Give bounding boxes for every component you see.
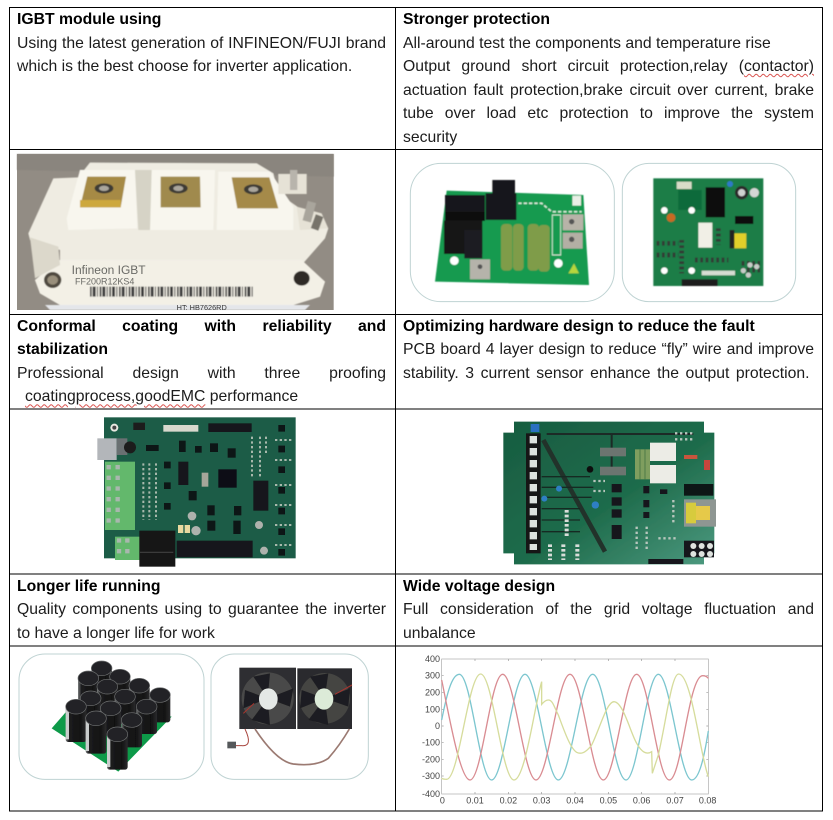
x axis labels: 0.03 bbox=[533, 795, 550, 805]
body text bbox=[403, 601, 814, 642]
heading: Optimizing hardware design to reduce the fault bbox=[403, 318, 755, 335]
body text: actuation fault protection,brake circuit over current, brake bbox=[403, 82, 814, 99]
body text: Using the latest generation of INFINEON/FUJI brand bbox=[17, 35, 386, 52]
body text bbox=[403, 35, 814, 146]
body text: tube over load etc protection to improve the system bbox=[403, 105, 814, 122]
body text: Full consideration of the grid voltage fluctuation and bbox=[403, 601, 814, 618]
text cell: Conformal coating bbox=[17, 318, 386, 408]
y axis labels: 100 bbox=[425, 704, 440, 714]
control board with transformer bbox=[622, 163, 796, 302]
x axis labels: 0.02 bbox=[500, 795, 517, 805]
phase curve: red bbox=[442, 674, 708, 780]
body text: stability. 3 current sensor enhance the output protection. bbox=[403, 365, 809, 382]
image: protection boards in rounded frames bbox=[410, 163, 796, 302]
twin cooling fans bbox=[211, 654, 368, 779]
module marking text: FF200R12KS4 bbox=[75, 277, 134, 287]
body text bbox=[17, 365, 386, 408]
x axis labels: 0.07 bbox=[666, 795, 684, 805]
text cell: Longer life running bbox=[17, 578, 386, 642]
body text bbox=[17, 35, 386, 75]
image: capacitor bank and cooling fans bbox=[19, 654, 368, 779]
y axis labels: -100 bbox=[422, 738, 440, 748]
x axis labels: 0.06 bbox=[633, 795, 650, 805]
image: Infineon IGBT module photo bbox=[17, 154, 334, 312]
module marking text: HT: HB7626RD bbox=[177, 303, 227, 312]
y axis labels bbox=[422, 654, 440, 799]
body text bbox=[17, 601, 386, 642]
x axis labels: 0.05 bbox=[600, 795, 617, 805]
text cell: Stronger protection bbox=[403, 11, 814, 146]
body text: Output ground short circuit protection,relay (contactor) bbox=[403, 58, 814, 75]
image: four layer PCB main board bbox=[503, 422, 716, 564]
body text: security bbox=[403, 129, 457, 146]
x axis labels bbox=[440, 795, 716, 805]
module marking text: Infineon IGBT bbox=[72, 263, 146, 277]
y axis labels: 400 bbox=[425, 654, 440, 664]
heading: Stronger protection bbox=[403, 11, 550, 28]
body text: to have a longer life for work bbox=[17, 625, 215, 642]
heading: IGBT module using bbox=[17, 11, 161, 28]
x axis labels: 0.08 bbox=[699, 795, 716, 805]
body text: Professional design with three proofing bbox=[17, 365, 386, 382]
body text bbox=[403, 341, 814, 382]
phase curve: yellow bbox=[442, 674, 708, 780]
module marking text bbox=[72, 263, 227, 312]
relay and brake resistor board bbox=[410, 163, 614, 302]
capacitor bank bbox=[19, 654, 204, 779]
body text: PCB board 4 layer design to reduce “fly” wire and improve bbox=[403, 341, 814, 358]
phase curve: blue bbox=[442, 674, 708, 780]
text cell: IGBT module using bbox=[17, 11, 386, 75]
x axis labels: 0.04 bbox=[566, 795, 584, 805]
heading: Wide voltage design bbox=[403, 578, 555, 595]
y axis labels: -200 bbox=[422, 754, 440, 764]
body text: All-around test the components and temperature rise bbox=[403, 35, 771, 52]
image: conformal coated control board bbox=[97, 417, 296, 567]
heading bbox=[17, 318, 386, 358]
text cell: Optimizing hardware design bbox=[403, 318, 814, 382]
body text: which is the best choose for inverter application. bbox=[17, 58, 352, 75]
body text: unbalance bbox=[403, 625, 476, 642]
y axis labels: 0 bbox=[435, 721, 440, 731]
heading: stabilization bbox=[17, 341, 108, 358]
text cell: Wide voltage design bbox=[403, 578, 814, 642]
x axis labels: 0.01 bbox=[466, 795, 484, 805]
y axis labels: -400 bbox=[422, 789, 440, 799]
body text: Quality components using to guarantee the inverter bbox=[17, 601, 386, 618]
y axis labels: 300 bbox=[425, 671, 440, 681]
body text: coatingprocess,goodEMC performance bbox=[25, 388, 298, 405]
chart: three phase voltage waveform bbox=[422, 654, 716, 805]
y axis labels: -300 bbox=[422, 771, 440, 781]
x axis labels: 0 bbox=[440, 795, 445, 805]
y axis labels: 200 bbox=[425, 687, 440, 697]
heading: Conformal coating with reliability and bbox=[17, 318, 386, 335]
heading: Longer life running bbox=[17, 578, 160, 595]
